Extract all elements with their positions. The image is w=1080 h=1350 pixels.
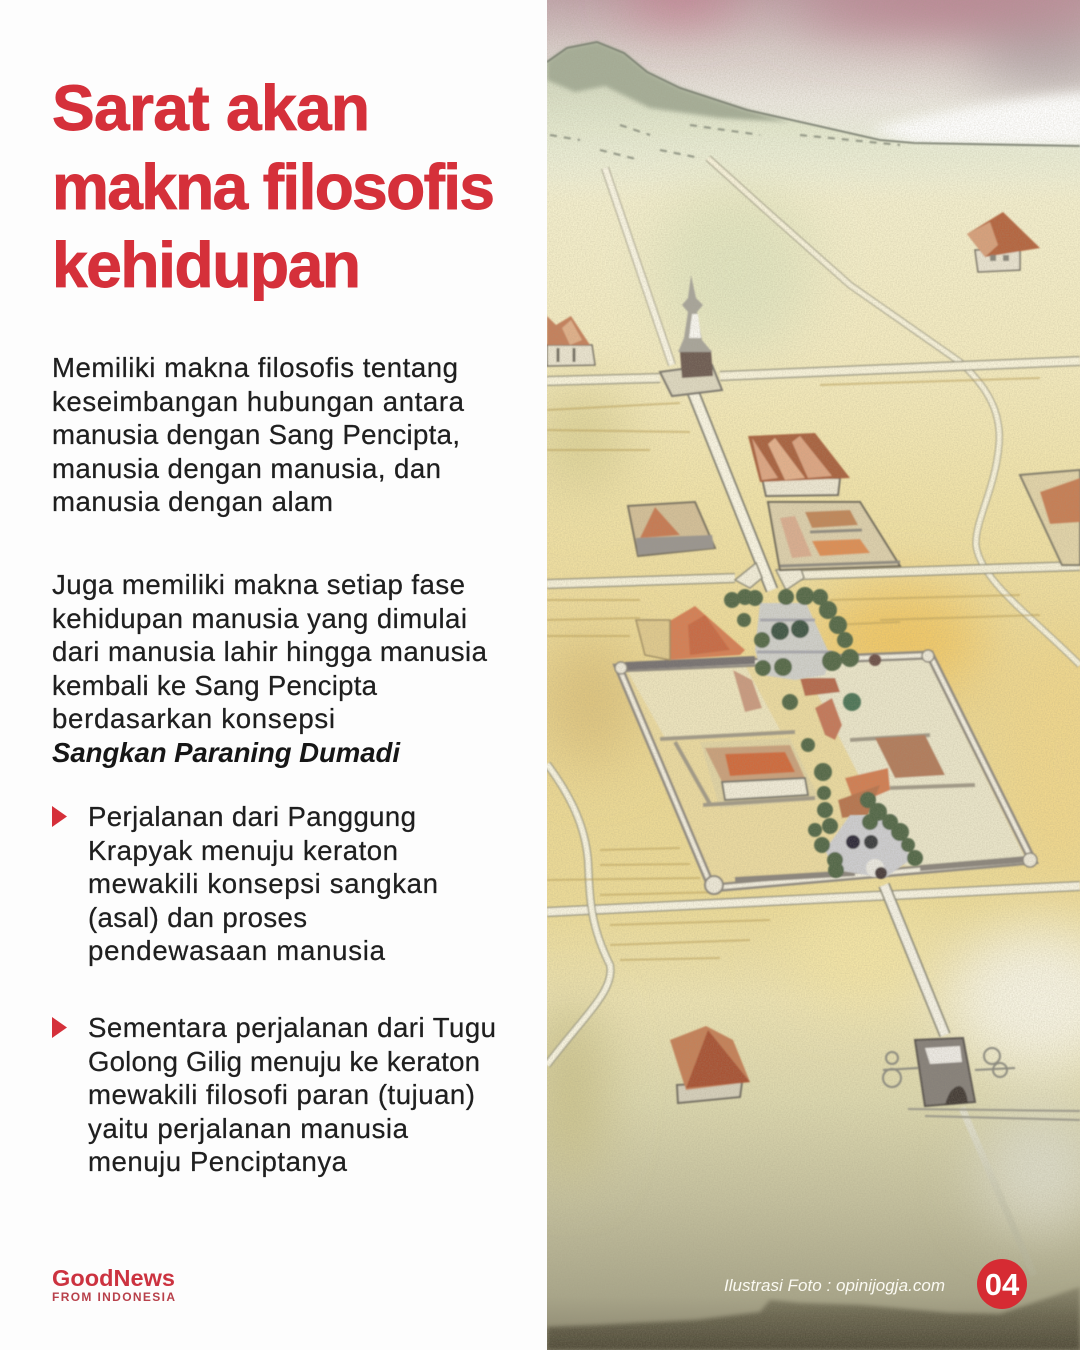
text block: second paragraph: Sangkan Paraning Dumadi	[52, 737, 401, 768]
bullet item: sangkan: Perjalanan dari Panggung	[88, 801, 416, 832]
title: makna filosofis	[52, 151, 495, 223]
house: triple roof	[748, 433, 850, 496]
text block: second paragraph: kembali ke Sang Pencipta	[52, 670, 378, 701]
icon: red triangle bullet	[52, 1017, 67, 1038]
west curved road	[547, 764, 611, 1065]
page number badge: 04	[985, 1267, 1020, 1302]
paper grain texture	[547, 0, 1080, 1350]
roads	[547, 158, 1080, 1275]
house: north-east	[967, 212, 1040, 272]
diagonal road and curve	[708, 158, 1080, 665]
text block: first paragraph: manusia dengan Sang Pencipta,	[52, 419, 460, 450]
south road to Krapyak	[884, 885, 945, 1035]
courtyard	[626, 668, 858, 881]
north square with trees	[724, 587, 861, 800]
logo: GoodNews from Indonesia: FROM INDONESIA	[52, 1290, 175, 1304]
monument: Tugu Golong Gilig	[660, 275, 722, 396]
dark tree line	[547, 1287, 1080, 1350]
text block: first paragraph: keseimbangan hubungan antara	[52, 386, 465, 417]
title: kehidupan	[52, 229, 361, 301]
trees north	[724, 587, 861, 800]
corner towers	[615, 662, 627, 674]
bullet item: sangkan	[52, 801, 438, 966]
house: south-west	[670, 1026, 750, 1103]
text block: first paragraph: manusia dengan manusia, dan	[52, 453, 441, 484]
compound: east edge	[1020, 470, 1080, 565]
bullet item: paran: yaitu perjalanan manusia	[88, 1113, 409, 1144]
bullet item: sangkan: pendewasaan manusia	[88, 935, 386, 966]
logo: GoodNews from Indonesia	[52, 1265, 175, 1304]
bullet item: paran	[52, 1012, 496, 1177]
colour washes of sky and fields	[535, 0, 1080, 1230]
third cross road	[547, 886, 1080, 912]
central roofs	[800, 678, 840, 696]
text block: second paragraph	[52, 569, 488, 768]
white cloud band	[870, 92, 1080, 145]
perimeter wall	[619, 655, 1032, 888]
panel: painted map of Yogyakarta philosophical axis	[535, 0, 1080, 1350]
text block: second paragraph: berdasarkan konsepsi	[52, 703, 335, 734]
west pavilion roof	[705, 745, 805, 782]
house: west	[547, 316, 595, 366]
bullet item: sangkan: (asal) dan proses	[88, 902, 307, 933]
north road to Tugu	[605, 168, 672, 365]
bullet item: paran: mewakili filosofi paran (tujuan)	[88, 1079, 475, 1110]
title	[52, 72, 495, 301]
mountain	[547, 40, 1080, 160]
second cross road	[547, 566, 1080, 584]
title: Sarat akan	[52, 72, 370, 144]
monument: Panggung Krapyak	[883, 1038, 1080, 1120]
inner walls	[660, 732, 975, 805]
gate at northern alun-alun	[735, 563, 804, 590]
compound: north-east of keraton	[768, 502, 900, 570]
logo: GoodNews from Indonesia: GoodNews	[52, 1265, 175, 1291]
text block: second paragraph: Juga memiliki makna setiap fase	[52, 569, 465, 600]
road Tugu to keraton	[693, 392, 772, 590]
bullet item: paran: Golong Gilig menuju ke keraton	[88, 1046, 480, 1077]
text block: first paragraph	[52, 352, 465, 517]
bullet item: sangkan: mewakili konsepsi sangkan	[88, 868, 438, 899]
text block: first paragraph: manusia dengan alam	[52, 486, 333, 517]
text block: second paragraph: dari manusia lahir hingga manusia	[52, 636, 488, 667]
bullet item: sangkan: Krapyak menuju keraton	[88, 835, 398, 866]
east pavilions	[875, 735, 945, 778]
field strokes	[547, 378, 1040, 960]
text block: second paragraph: kehidupan manusia yang dimulai	[52, 603, 467, 634]
text block: first paragraph: Memiliki makna filosofis tentang	[52, 352, 458, 383]
south road faded	[962, 1108, 1034, 1275]
house: west of road	[628, 502, 715, 556]
bullet item: paran: Sementara perjalanan dari Tugu	[88, 1012, 496, 1043]
bullet item: paran: menuju Penciptanya	[88, 1146, 348, 1177]
caption: photo credit: Ilustrasi Foto : opinijogja.com	[724, 1276, 945, 1295]
first cross road	[547, 361, 1080, 381]
icon: red triangle bullet	[52, 806, 67, 827]
south square with trees	[808, 792, 923, 879]
panel: white text column	[0, 0, 547, 1350]
page number badge	[977, 1259, 1027, 1309]
keraton walled compound	[615, 606, 1037, 894]
palace gate	[869, 654, 881, 666]
north roof	[665, 606, 745, 660]
